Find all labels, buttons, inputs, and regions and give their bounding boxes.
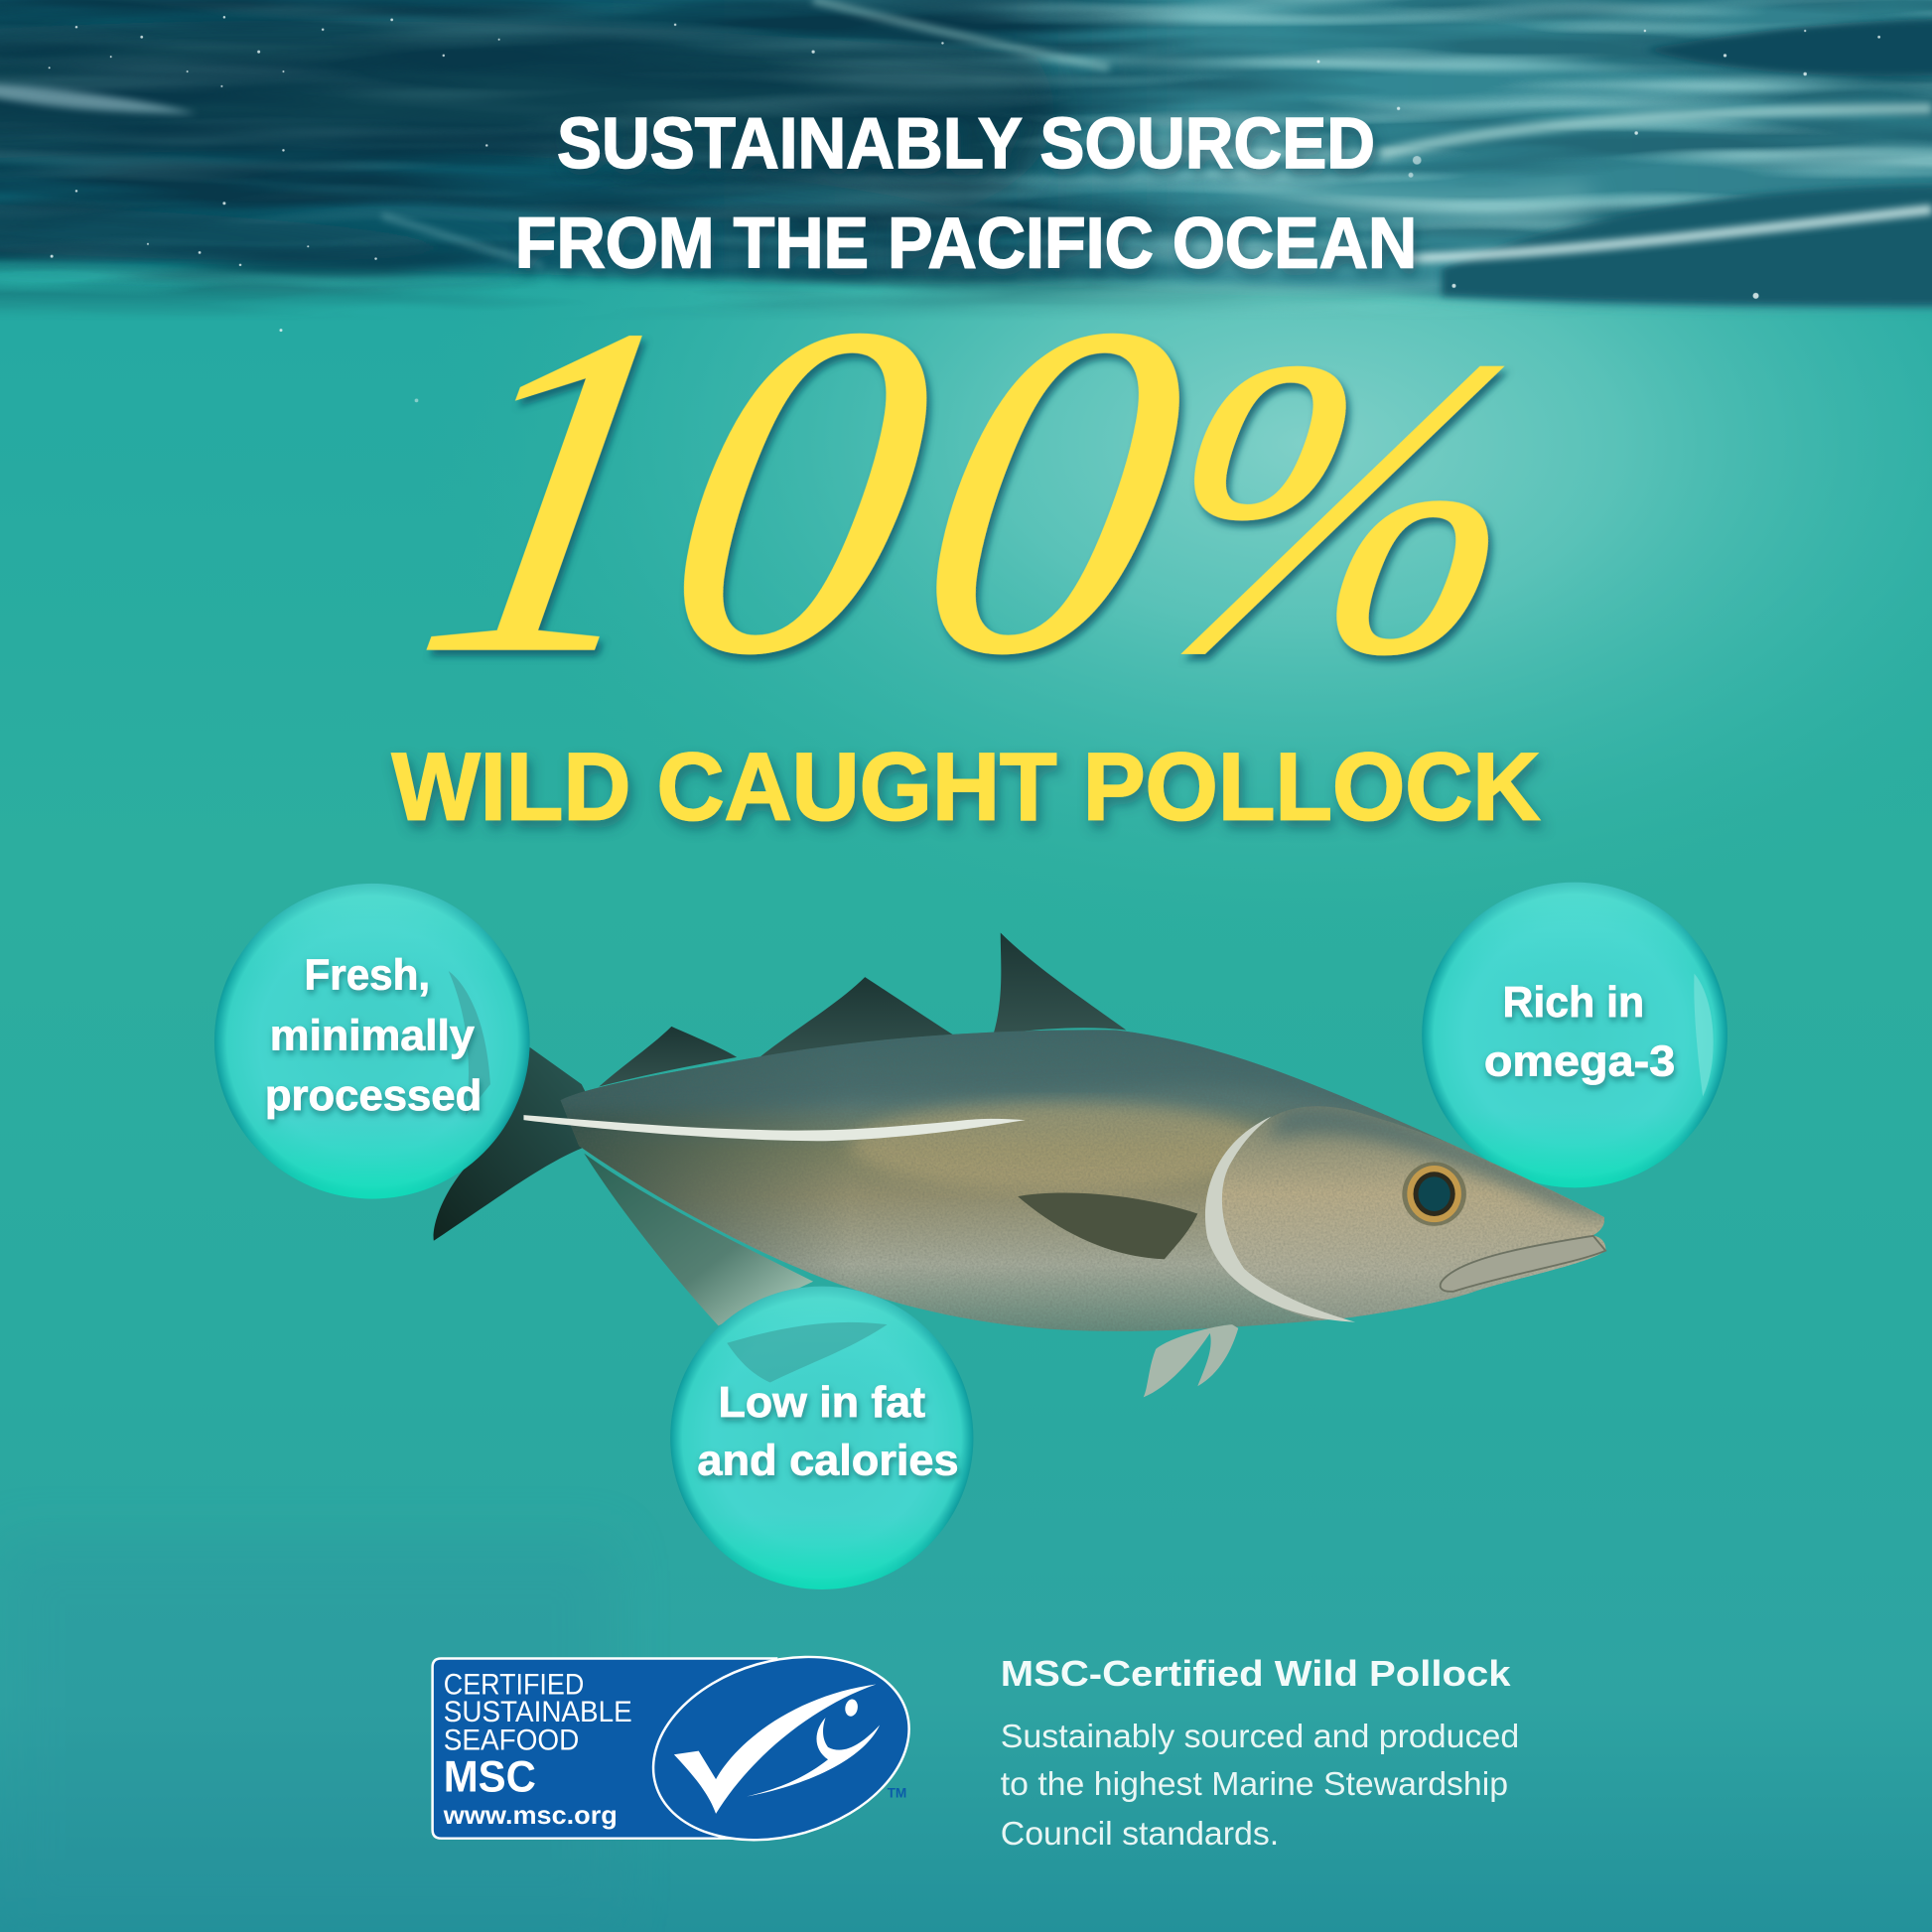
heading: sustainably sourced [515,104,1417,283]
bubble: fresh, minimally processed [214,884,530,1199]
certification heading: MSC-Certified Wild Pollock [1001,1653,1512,1694]
big number: 100%: 0 [888,227,1217,753]
fish: ventral fin [1144,1324,1238,1397]
heading: sustainably sourced: FROM THE PACIFIC OCEAN [515,204,1417,283]
fish: body [561,1030,1605,1331]
certification description [1001,1719,1519,1853]
bubble: low in fat and calories: and calories [697,1438,959,1485]
certification description: to the highest Marine Stewardship [1001,1766,1508,1803]
logo: trademark: TM [888,1786,906,1801]
logo: fish eye [844,1698,859,1718]
fish: anal fin [584,1154,813,1325]
text block: msc certification [1001,1653,1519,1853]
fish: mouth [1441,1236,1605,1292]
certification description: Sustainably sourced and produced [1001,1719,1519,1755]
heading: wild caught pollock: WILD CAUGHT POLLOCK [392,732,1540,840]
fish: gill cover [1205,1116,1355,1322]
fish illustration [434,932,1626,1397]
fish: shading and head [561,1030,1606,1330]
bubble: rich in omega-3: omega-3 [1484,1037,1675,1085]
logo: fish tick mark [674,1685,880,1814]
fish: lateral line [523,1115,1026,1141]
big number: 100%: 1 [392,227,722,753]
logo: oval [631,1628,931,1868]
bubble: low in fat and calories [670,1287,973,1589]
heading: sustainably sourced: SUSTAINABLY SOURCED [557,104,1375,184]
logo: wordmark [443,1668,632,1830]
certification description: Council standards. [1001,1816,1279,1853]
bubble: fresh, minimally processed: minimally [270,1012,475,1059]
big number: 100%: % [1124,272,1561,742]
bubble: fresh, minimally processed: processed [265,1072,482,1120]
background: water surface waves [0,0,1932,321]
bubble: fresh, minimally processed: Fresh, [305,952,430,1000]
background: floating particles [49,16,1880,402]
fish: eye [1402,1162,1466,1226]
fish: tail fin [434,1047,594,1241]
logo: blue label [433,1658,776,1839]
logo: wordmark: MSC [444,1753,536,1802]
logo: wordmark: SEAFOOD [444,1724,579,1756]
bubble: rich in omega-3 [1422,883,1727,1187]
fish: pectoral fin [1018,1193,1197,1259]
fish: dorsal fins [599,932,1126,1087]
bubble: rich in omega-3: Rich in [1502,979,1644,1027]
big number: 100%: 0 [634,227,965,753]
logo: wordmark: CERTIFIED [444,1668,584,1701]
msc logo [433,1628,931,1868]
logo: wordmark: www.msc.org [443,1800,618,1830]
bubble: low in fat and calories: Low in fat [719,1379,925,1427]
logo: wordmark: SUSTAINABLE [444,1696,632,1728]
